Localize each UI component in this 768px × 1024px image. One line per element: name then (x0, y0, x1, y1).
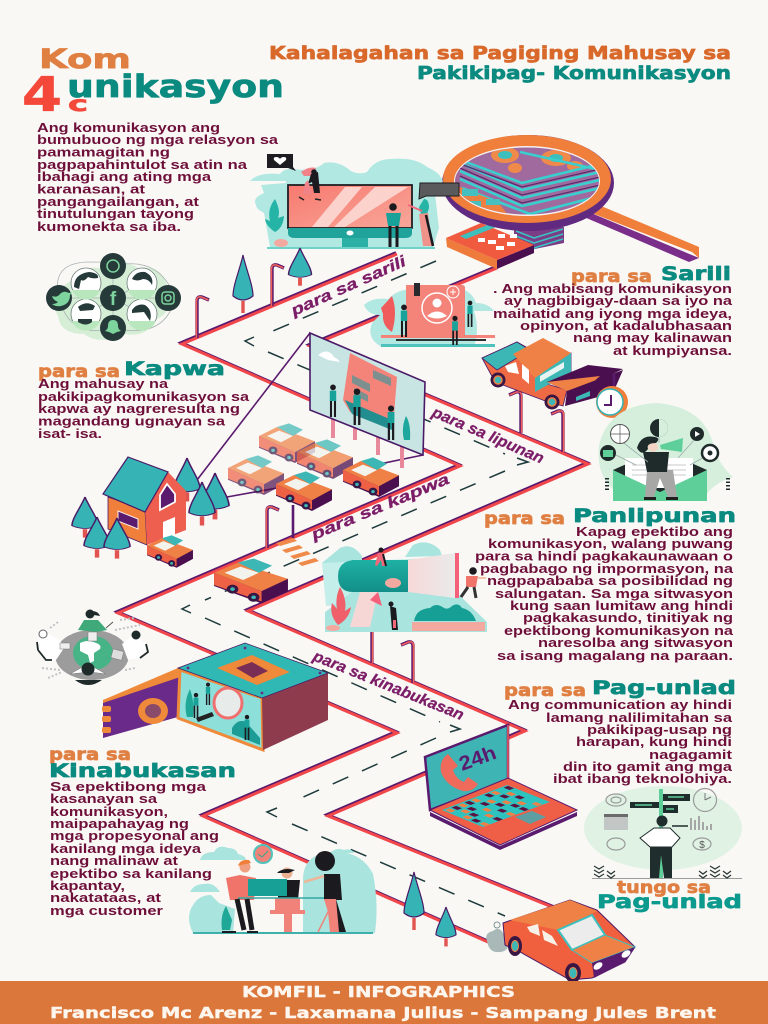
figures (299, 168, 433, 247)
illustration: car on road (214, 559, 288, 603)
panel: tungo sa Pag-unlad: Pag-unlad (597, 891, 742, 913)
body text: nagagamit (649, 748, 733, 762)
body text: kasanayan sa (50, 792, 158, 806)
body text: naresolba ang sitwasyon (538, 636, 733, 650)
illustration: globe with people around a table (37, 610, 148, 685)
body text: komunikasyon, (50, 805, 168, 819)
intro text: Ang komunikasyon ang (37, 121, 220, 135)
illustration: man at signpost: $ (699, 840, 705, 851)
icon: grey speech bubble (419, 183, 459, 199)
intro text: bumubuoo ng mga relasyon sa (37, 133, 279, 147)
panel: tungo sa Pag-unlad: tungo sa (617, 878, 711, 898)
illustration: open safe box (102, 643, 328, 750)
body text: maihatid ang iyong mga ideya, (493, 307, 732, 321)
heading: para sa (484, 509, 565, 529)
person bottom (70, 662, 106, 685)
body text: ibat ibang teknolohiya. (553, 772, 732, 786)
illustration: profile book scene (364, 283, 495, 347)
road furniture: lamps and trees (196, 248, 564, 946)
heading: Kinabukasan (49, 760, 236, 782)
road label: para sa lipunan: para sa lipunan (428, 404, 546, 467)
illustration: car with exhaust at road end (486, 900, 635, 983)
body text: pakikipag-usap ng (587, 723, 732, 737)
body text: maipapahayag ng (50, 817, 189, 831)
illustration: laptop 24h (425, 725, 577, 850)
road: winding edges and centre line (117, 253, 588, 946)
body text (38, 377, 250, 441)
road label: para sa sarili: para sa sarili (287, 253, 409, 320)
body text: din ito gamit ang mga (563, 760, 733, 774)
title: Komunikasyon: unikasyon (67, 69, 284, 105)
illustration: pickup truck and scale clock (482, 338, 628, 418)
body text: nang may kalinawan (573, 331, 732, 345)
intro text: pamamagitan ng (37, 146, 170, 160)
heading (49, 745, 236, 782)
body text: salungatan. Sa mga sitwasyon (495, 587, 733, 601)
road label: para sa kinabukasan: para sa kinabukasan (310, 648, 466, 724)
title: Komunikasyon (22, 44, 284, 123)
illustration: laptop 24h: 24h (456, 742, 499, 776)
illustration: parked cars (228, 423, 399, 511)
subtitle: Kahalagahan (269, 43, 731, 84)
icon: heart speech bubble (267, 154, 296, 171)
heading: Sarili (661, 263, 731, 285)
subtitle: Kahalagahan: Kahalagahan sa Pagiging Mahusay sa (269, 43, 731, 64)
illustration: monitor scene (250, 154, 459, 249)
illustration: billboard connected to the house (197, 333, 425, 497)
footer bar (0, 981, 768, 1024)
body text: kung saan lumitaw ang hindi (510, 599, 733, 613)
body text: lamang nalilimitahan sa (546, 711, 733, 725)
body text: . Ang mabisang komunikasyon (493, 282, 732, 296)
panel: para sa Pag-unlad (504, 677, 736, 786)
body text: kapwa ay nagreresulta ng (38, 402, 240, 416)
body text: komunikasyon, walang puwang (488, 537, 733, 551)
illustration: people at a table (189, 845, 377, 934)
intro text: pangangailangan, at (37, 195, 200, 209)
body text: nang malinaw at (50, 854, 179, 868)
body text: Ang mahusay na (38, 377, 169, 391)
panel: para sa Kapwa (38, 358, 250, 441)
panel: para sa Kinabukasan (49, 745, 236, 918)
heading (571, 263, 731, 287)
body text: pagbabago ng impormasyon, na (480, 562, 734, 576)
body text: mga customer (50, 904, 163, 918)
road label: para sa kapwa: para sa kapwa (308, 471, 453, 544)
body text: sa isang magalang na paraan. (497, 649, 733, 663)
heading: Panlipunan (573, 505, 736, 527)
heading (484, 505, 736, 529)
intro text: pagpapahintulot sa atin na (37, 158, 248, 172)
road markings: crosswalk (276, 538, 319, 566)
body text (50, 780, 219, 918)
person left (37, 630, 70, 662)
body text: nakatataas, at (50, 891, 162, 905)
body text: isat- isa. (38, 427, 102, 441)
body text: ay nagbibigay-daan sa iyo na (504, 294, 733, 308)
title: Komunikasyon: Kom (39, 44, 131, 75)
heading: para sa (504, 681, 586, 701)
intro text: tinutulungan tayong (37, 207, 194, 221)
body text: mga propesyonal ang (50, 829, 219, 843)
illustration: megaphone scene (322, 542, 487, 632)
body text: pakikipagkomunikasyon sa (38, 390, 250, 404)
body text: at kumpiyansa. (613, 344, 732, 358)
illustration: social network icons: f (110, 289, 117, 310)
body text: epektibo sa kanilang (50, 867, 212, 881)
title: Komunikasyon: c (68, 92, 88, 116)
intro text: ibahagi ang ating mga (37, 170, 212, 184)
heading: para sa (571, 267, 652, 287)
person right (111, 630, 148, 660)
body text: Kapag epektibo ang (576, 525, 733, 539)
illustration: man at signpost (584, 786, 742, 879)
intro text: karanasan, at (37, 182, 146, 196)
body text (508, 698, 733, 786)
panel: para sa Panlipunan (475, 505, 736, 663)
footer: title: KOMFIL - INFOGRAPHICS (242, 983, 515, 1001)
body text: opinyon, at kadalubhasaan (520, 319, 732, 333)
intro text (37, 121, 279, 234)
heading: para sa (49, 745, 131, 765)
panel: para sa Sarili (493, 263, 733, 358)
illustration: social network icons (46, 253, 181, 341)
person top (78, 610, 113, 641)
body text: magandang ugnayan sa (38, 414, 226, 428)
heading (38, 358, 225, 382)
body text (475, 525, 734, 663)
illustration: house and trees (72, 457, 229, 568)
body text: kapantay, (50, 879, 125, 893)
heading: para sa (38, 362, 120, 382)
heading: Pag-unlad (592, 677, 736, 699)
body text: pagkakasundo, tinitiyak ng (523, 611, 733, 625)
illustration: magnifier over data (442, 135, 699, 269)
illustration: woman with megaphone and envelope (599, 403, 733, 501)
title (22, 43, 731, 123)
footer: authors: Francisco Mc Arenz - Laxamana Julius - Sampang Jules Brent (50, 1004, 716, 1022)
title: Komunikasyon: 4 (22, 68, 62, 123)
body text: nagpapababa sa posibilidad ng (487, 574, 733, 588)
body text (493, 282, 733, 358)
body text: para sa hindi pagkakaunawaan o (475, 550, 733, 564)
subtitle: Kahalagahan: Pakikipag- Komunikasyon (417, 63, 731, 84)
body text: Ang communication ay hindi (508, 698, 732, 712)
intro text: kumonekta sa iba. (37, 220, 181, 234)
body text: Sa epektibong mga (50, 780, 207, 794)
heading: Kapwa (124, 358, 225, 380)
body text: epektibong komunikasyon na (504, 624, 734, 638)
body text: harapan, kung hindi (576, 735, 732, 749)
panel: tungo sa Pag-unlad (597, 878, 742, 913)
heading (504, 677, 736, 701)
body text: kanilang mga ideya (50, 842, 202, 856)
